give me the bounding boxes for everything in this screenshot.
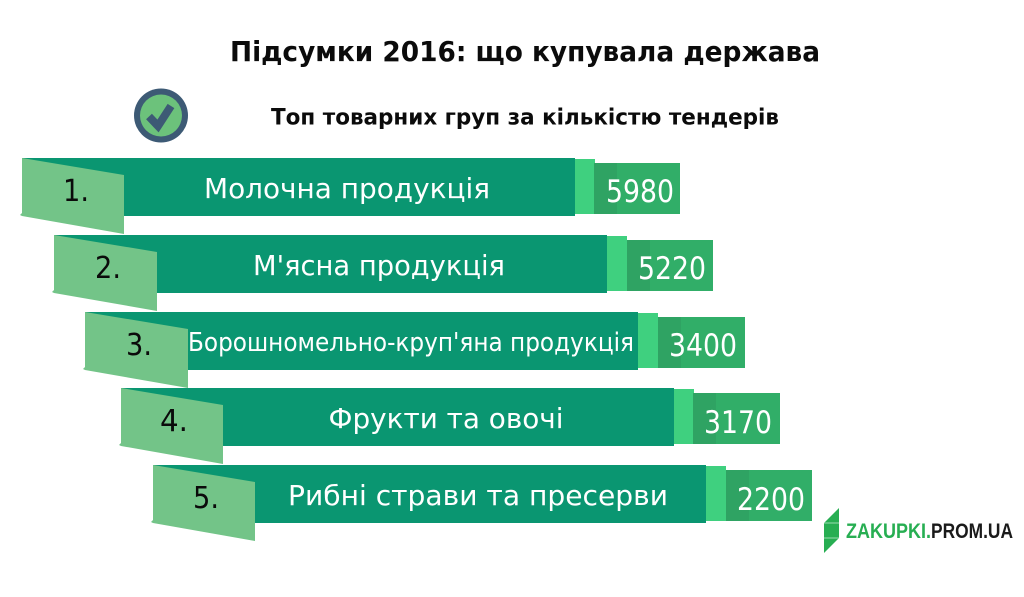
- row 4: fruit and vegetables: 4.: [160, 404, 188, 439]
- row 1: dairy products: 5980: [606, 174, 674, 210]
- row 3: flour and cereal products: [83, 312, 745, 388]
- row 1: dairy products: 1.: [63, 174, 89, 209]
- title: Підсумки 2016: що купувала держава: [230, 35, 820, 68]
- row 1: dairy products: [20, 158, 680, 234]
- icon: check mark badge: [134, 88, 188, 142]
- logo: ZAKUPKI.PROM.UA: ZAKUPKI.: [846, 520, 931, 543]
- row 4: fruit and vegetables: Фрукти та овочі: [328, 402, 564, 435]
- row 2: meat products: М'ясна продукція: [253, 249, 505, 282]
- row 2: meat products: 5220: [638, 251, 706, 287]
- row 5: fish dishes and preserves: 5.: [193, 481, 219, 516]
- row 3: flour and cereal products: 3.: [126, 328, 152, 363]
- row 5: fish dishes and preserves: 2200: [737, 482, 805, 518]
- row 2: meat products: [52, 235, 713, 311]
- row 4: fruit and vegetables: [119, 388, 780, 464]
- row 5: fish dishes and preserves: Рибні страви та пресерви: [288, 479, 668, 512]
- subtitle: Топ товарних груп за кількістю тендерів: [271, 106, 779, 130]
- row 3: flour and cereal products: 3400: [669, 328, 737, 364]
- row 5: fish dishes and preserves: [151, 465, 812, 541]
- row 4: fruit and vegetables: 3170: [704, 405, 772, 441]
- row 1: dairy products: Молочна продукція: [204, 172, 490, 205]
- logo: ZAKUPKI.PROM.UA: [824, 508, 1013, 553]
- row 2: meat products: 2.: [95, 251, 121, 286]
- row 3: flour and cereal products: Борошномельно-круп'яна продукція: [188, 328, 634, 358]
